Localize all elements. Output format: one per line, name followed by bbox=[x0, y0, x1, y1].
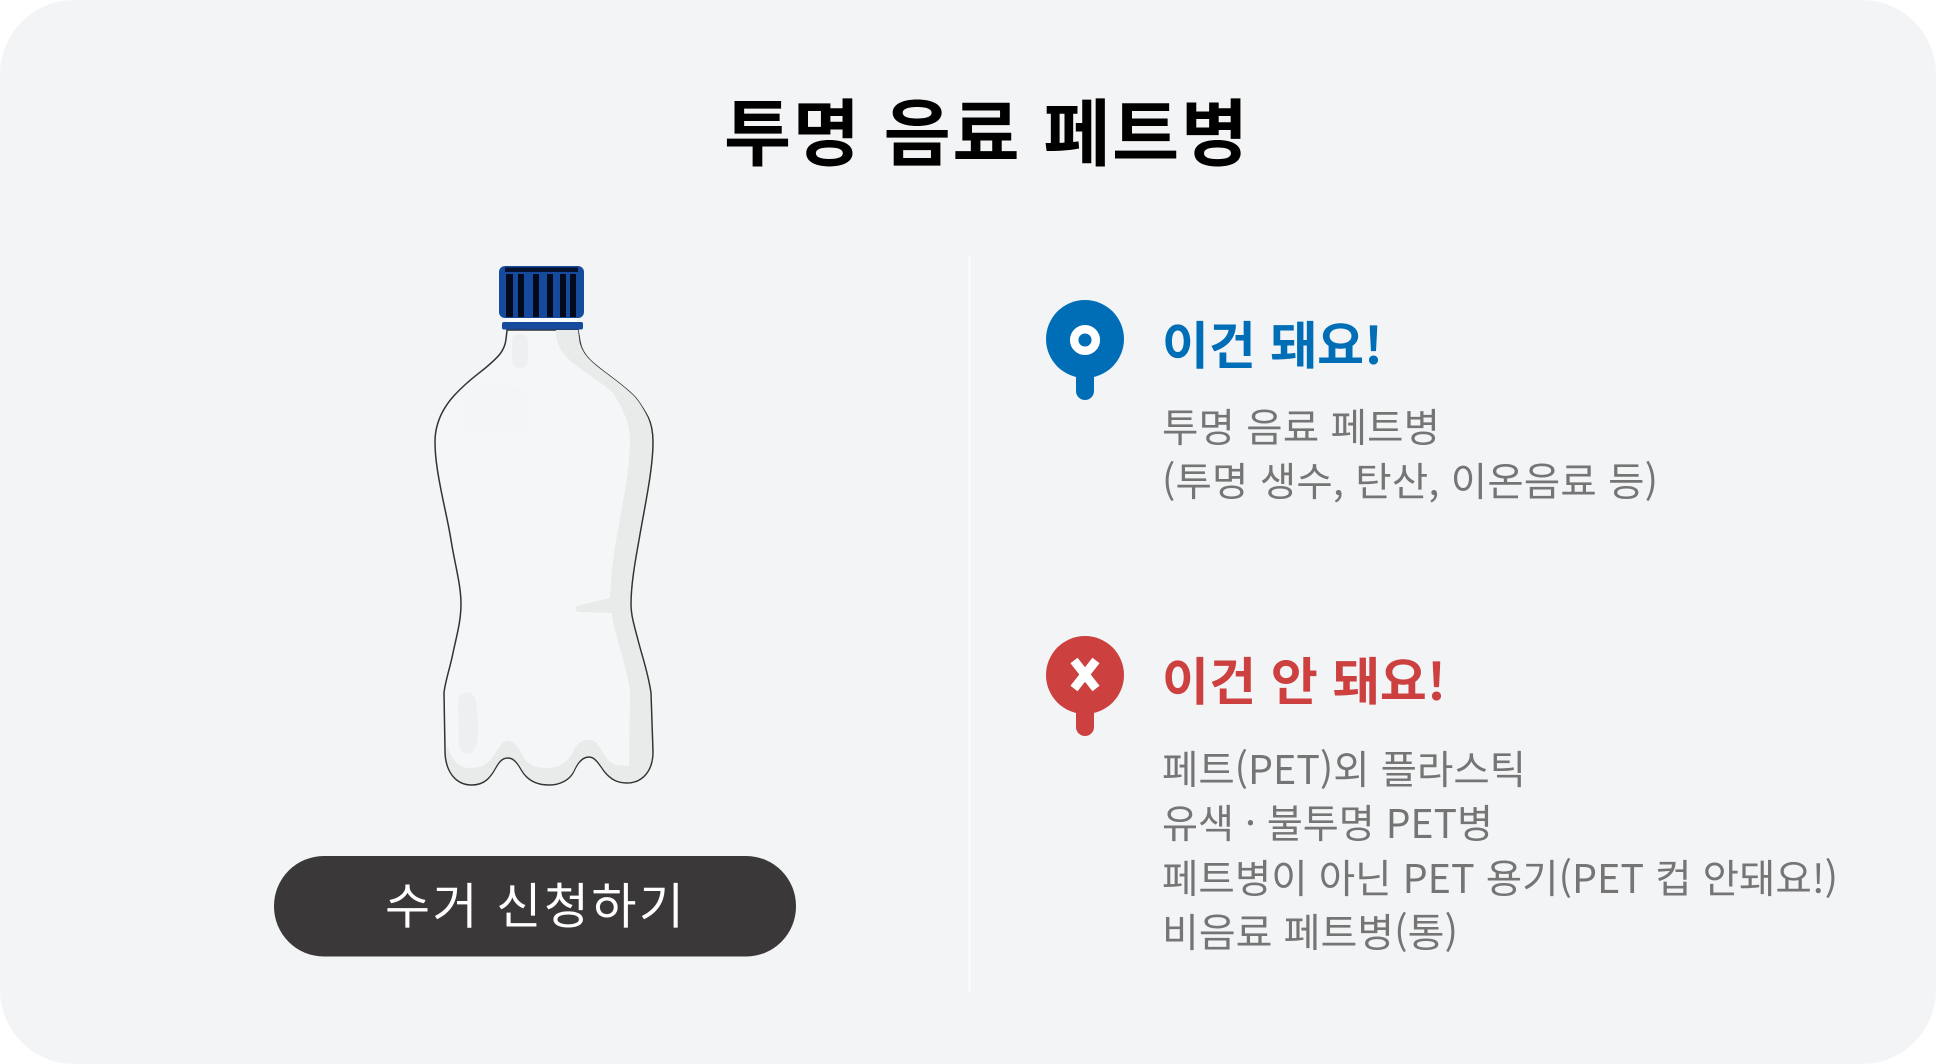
text block: allowed items: (투명 생수, 탄산, 이온음료 등) bbox=[1162, 451, 1658, 508]
heading: allowed: 이건 돼요! bbox=[1162, 305, 1383, 379]
bottle body bbox=[435, 330, 653, 785]
cap ridges bbox=[506, 274, 576, 317]
highlight: shoulder bbox=[462, 387, 528, 433]
text block: not allowed items bbox=[1162, 739, 1838, 959]
cap top shadow bbox=[505, 268, 578, 272]
heading: not allowed: 이건 안 돼요! bbox=[1162, 641, 1446, 715]
button: 수거 신청하기 bbox=[274, 856, 796, 956]
text block: not allowed items: 페트병이 아닌 PET 용기(PET 컵 안돼요!) bbox=[1162, 848, 1838, 905]
highlight: base bbox=[458, 692, 478, 754]
highlight: neck bbox=[512, 334, 528, 368]
bottle cap bbox=[499, 266, 584, 318]
text block: not allowed items: 유색 · 불투명 PET병 bbox=[1162, 793, 1493, 850]
bottle shading bbox=[446, 330, 652, 784]
cap ring bbox=[502, 322, 583, 330]
icon: PET bottle bbox=[435, 266, 653, 785]
icon: O allowed bbox=[1046, 300, 1124, 400]
title: 투명 음료 페트병 bbox=[724, 76, 1248, 182]
divider bbox=[968, 256, 970, 993]
text block: allowed items bbox=[1162, 397, 1658, 508]
text block: not allowed items: 페트(PET)외 플라스틱 bbox=[1162, 739, 1526, 796]
icon: X not allowed bbox=[1046, 636, 1124, 736]
button: 수거 신청하기: 수거 신청하기 bbox=[385, 868, 684, 938]
text block: allowed items: 투명 음료 페트병 bbox=[1162, 397, 1440, 454]
neck gap bbox=[507, 318, 577, 322]
text block: not allowed items: 비음료 페트병(통) bbox=[1162, 902, 1458, 959]
